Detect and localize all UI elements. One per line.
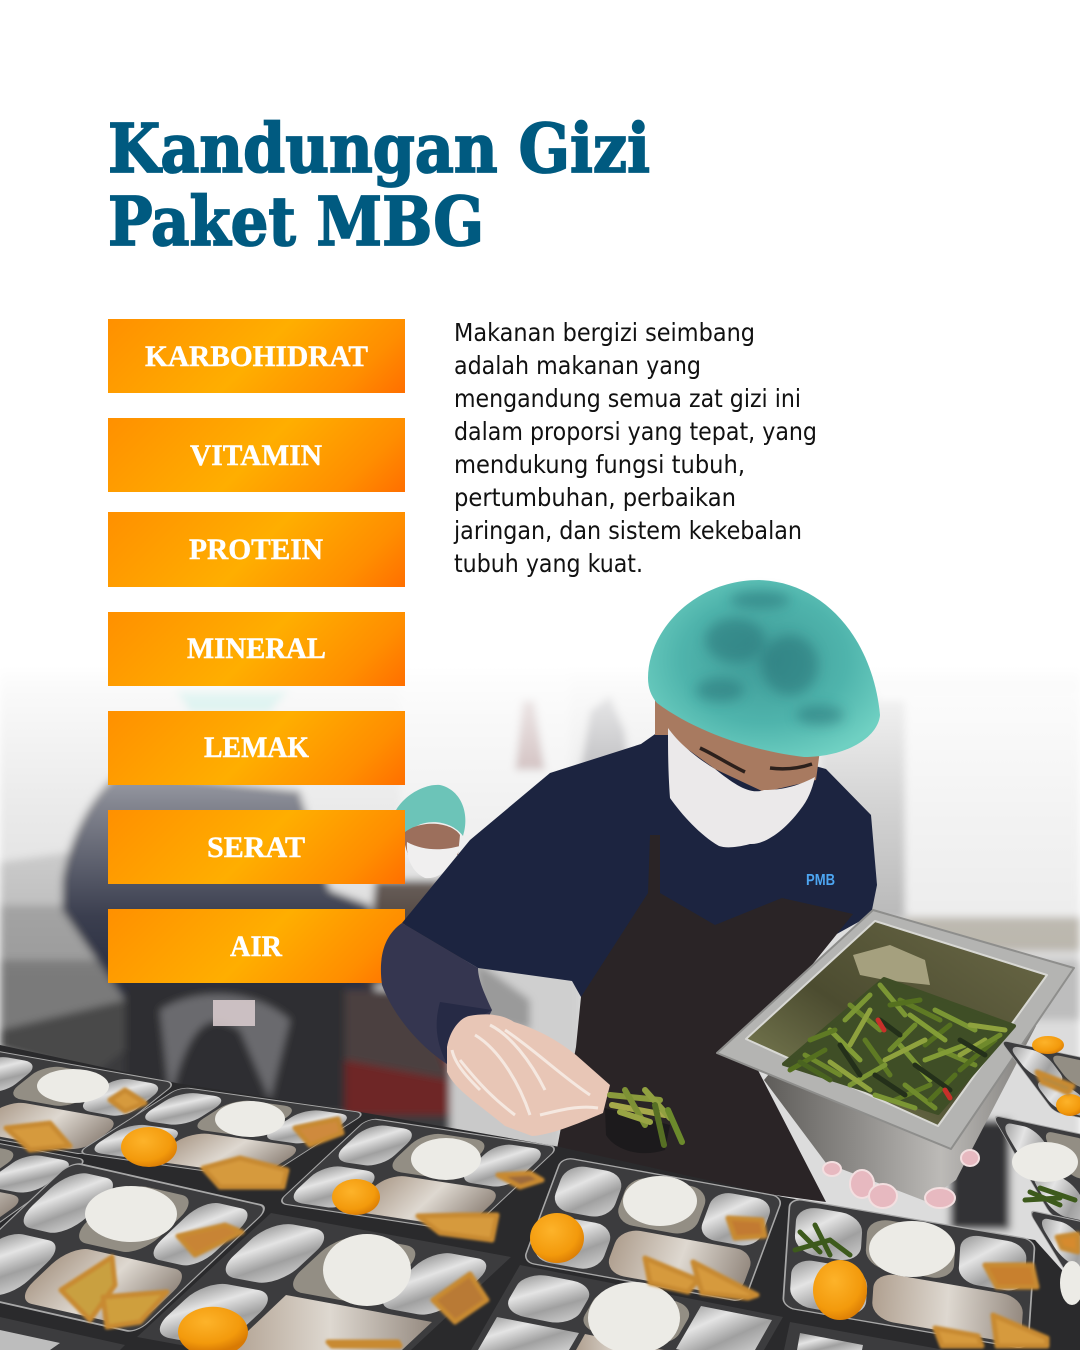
tray: right lower xyxy=(1028,1210,1080,1348)
tray: back second xyxy=(77,1087,366,1179)
apron xyxy=(554,835,853,1202)
green beans side dishes xyxy=(795,1188,1075,1255)
description text: jaringan, dan sistem kekebalan xyxy=(453,516,802,545)
button: lemak: LEMAK xyxy=(204,731,310,764)
green beans in pan xyxy=(784,979,1014,1113)
serving scoop xyxy=(605,1108,670,1153)
button: karbohidrat xyxy=(108,319,405,393)
button: karbohidrat: KARBOHIDRAT xyxy=(145,340,368,373)
tray row: back left xyxy=(0,1050,176,1155)
oranges xyxy=(121,1036,1080,1350)
face xyxy=(655,700,820,792)
hair net xyxy=(648,580,880,757)
steel pan xyxy=(717,910,1074,1201)
eyes and brows xyxy=(700,748,812,772)
main worker xyxy=(381,580,1074,1208)
button: serat: SERAT xyxy=(207,831,305,864)
tray: back fifth xyxy=(783,1198,1035,1349)
button: mineral xyxy=(108,612,405,686)
button: serat xyxy=(108,810,405,884)
tray: back third xyxy=(277,1118,559,1232)
face mask xyxy=(668,728,815,847)
glove xyxy=(447,1014,610,1136)
scooped green beans xyxy=(610,1090,682,1145)
tray: front far right xyxy=(784,1322,945,1350)
description text: dalam proporsi yang tepat, yang xyxy=(454,417,817,446)
glove highlights xyxy=(452,1025,598,1115)
tray: far left xyxy=(0,1125,88,1232)
button: mineral: MINERAL xyxy=(187,632,326,665)
rice portions xyxy=(37,1069,1080,1350)
forearm sleeve xyxy=(381,923,492,1064)
button: lemak xyxy=(108,711,405,785)
tray: front right xyxy=(471,1265,783,1350)
description text: adalah makanan yang xyxy=(454,351,701,380)
table under trays xyxy=(0,1045,1080,1350)
button: air: AIR xyxy=(230,930,282,963)
button: vitamin: VITAMIN xyxy=(190,439,322,472)
tray: right middle xyxy=(992,1115,1080,1247)
hair net texture xyxy=(696,591,844,725)
button: protein xyxy=(108,512,405,587)
description text: mendukung fungsi tubuh, xyxy=(454,450,745,479)
description text: tubuh yang kuat. xyxy=(454,549,643,578)
kitchen scene background xyxy=(0,640,1080,1350)
button: vitamin xyxy=(108,418,405,492)
logo text: PMB xyxy=(806,872,835,889)
food trays xyxy=(0,1040,1080,1350)
crumbs xyxy=(853,945,930,985)
description text: pertumbuhan, perbaikan xyxy=(454,483,736,512)
description text xyxy=(453,318,817,578)
tray: right upper xyxy=(1000,1040,1080,1142)
fingers under pan xyxy=(823,1150,979,1208)
tray: bottom left xyxy=(0,1317,125,1350)
description text: Makanan bergizi seimbang xyxy=(454,318,755,347)
button: air xyxy=(108,909,405,983)
title xyxy=(108,109,650,261)
button: protein: PROTEIN xyxy=(189,533,323,566)
fried side dishes xyxy=(6,1072,1078,1346)
tray: front centre xyxy=(137,1213,511,1350)
nutrient list xyxy=(108,319,405,983)
description text: mengandung semua zat gizi ini xyxy=(454,384,801,413)
cuff xyxy=(437,1002,492,1064)
title: Kandungan Gizi xyxy=(108,109,650,188)
shirt xyxy=(402,725,877,1010)
tray: back fourth xyxy=(523,1157,783,1302)
background worker with hair net and mask xyxy=(390,785,465,878)
tray: front left xyxy=(0,1162,270,1333)
title: Paket MBG xyxy=(108,182,484,261)
